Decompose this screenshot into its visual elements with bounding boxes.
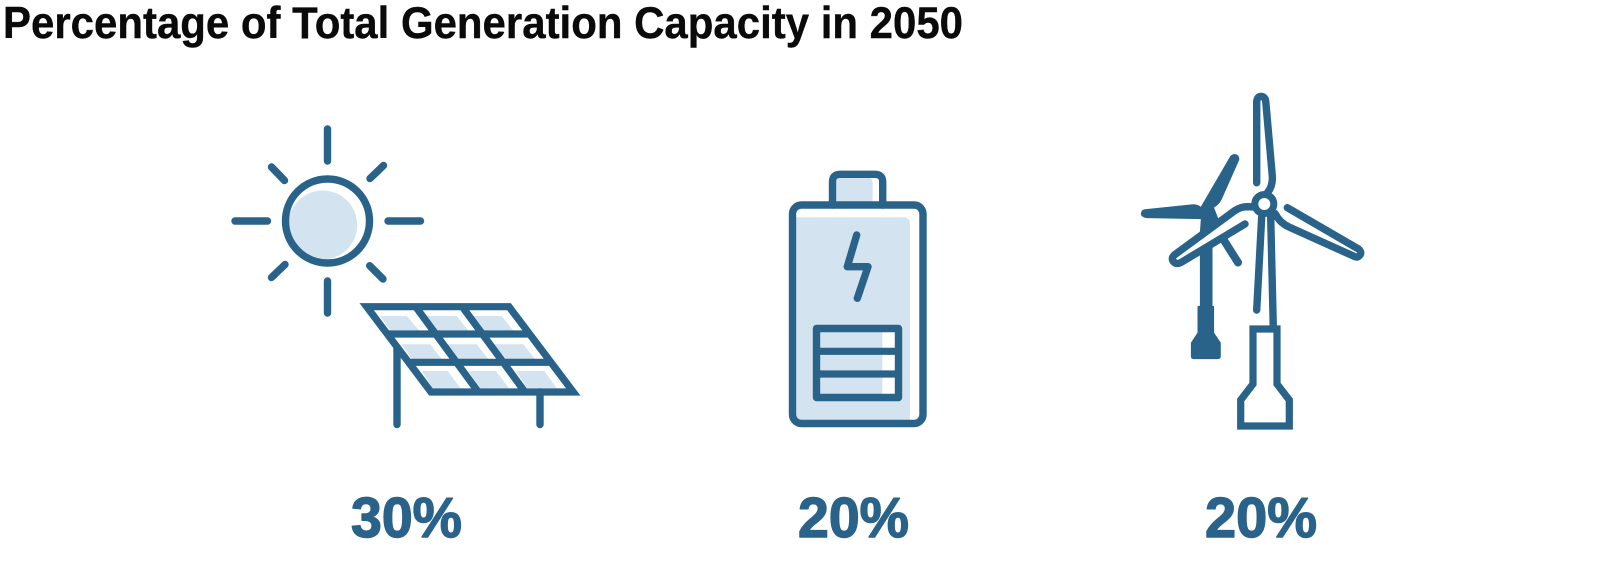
lightning bolt [847,235,868,298]
front turbine left blade [1172,207,1256,263]
icon: wind turbines [1142,96,1361,426]
value: battery 20%: 20% [798,486,909,550]
battery body [792,205,923,424]
front turbine hub [1255,194,1274,214]
front turbine top blade [1257,96,1272,192]
title: Percentage of Total Generation Capacity in 2050 [3,0,963,48]
icon: sun and solar panel [235,129,573,424]
value: wind 20%: 20% [1205,486,1317,550]
icon: battery [792,174,923,424]
front turbine tower [1257,217,1273,328]
icon: solar panel [367,307,573,424]
front turbine base [1241,329,1289,426]
charge level bars [816,328,898,398]
battery cap [832,174,883,205]
icon: sun [235,129,420,313]
value: solar 30%: 30% [351,486,462,550]
front turbine right blade [1275,208,1361,257]
back turbine [1142,155,1239,358]
